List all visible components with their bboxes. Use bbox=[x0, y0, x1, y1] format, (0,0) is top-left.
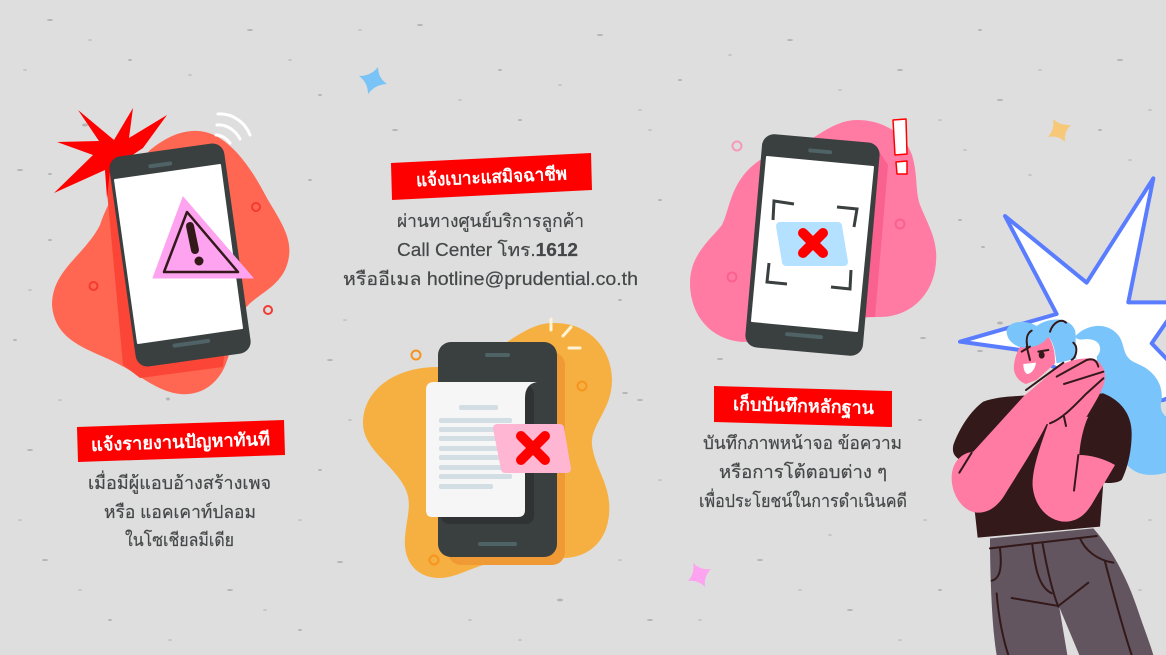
forearm right bbox=[1033, 417, 1115, 522]
icon: blue sparkle bbox=[359, 67, 387, 94]
text: contact channels: ผ่านทางศูนย์บริการลูกค้า bbox=[397, 211, 584, 232]
dots bbox=[412, 350, 586, 564]
heading: report immediately bbox=[77, 420, 285, 462]
scan frame corners bbox=[767, 201, 857, 289]
heading: report fraud bbox=[391, 153, 592, 200]
forearm left bbox=[952, 358, 1105, 513]
text: keep evidence: เพื่อประโยชน์ในการดำเนินคดี bbox=[699, 488, 907, 511]
blob: orange bbox=[363, 323, 612, 578]
icon: rejected card bbox=[497, 428, 567, 469]
hair ponytail bbox=[1075, 326, 1166, 475]
phone bbox=[744, 133, 881, 357]
icon: rejected card bbox=[780, 226, 844, 262]
icon: wifi signal bbox=[216, 114, 250, 143]
text: contact channels: หรืออีเมล hotline@prudential.co.th bbox=[343, 269, 638, 289]
panel: evidence illustration bbox=[690, 119, 936, 357]
icon: orange sparkle bbox=[1048, 119, 1071, 142]
phone bbox=[438, 342, 557, 557]
text: contact channels bbox=[343, 211, 638, 289]
blue burst bbox=[960, 178, 1166, 403]
hair fringe bbox=[1007, 319, 1077, 363]
text: report immediately: ในโซเชียลมีเดีย bbox=[125, 529, 234, 550]
heading: report immediately: แจ้งรายงานปัญหาทันที bbox=[91, 429, 270, 456]
dots bbox=[728, 142, 904, 282]
shirt bbox=[953, 393, 1132, 538]
rays bbox=[551, 319, 580, 348]
text: report immediately: เมื่อมีผู้แอบอ้างสร้างเพจ bbox=[88, 470, 271, 494]
phone bbox=[108, 142, 252, 368]
blob: red bbox=[52, 131, 289, 394]
text: report immediately: หรือ แอคเคาท์ปลอม bbox=[104, 502, 256, 522]
character: surprised woman bbox=[952, 178, 1166, 655]
icon: red burst bbox=[54, 108, 167, 198]
face bbox=[1022, 321, 1076, 360]
text: report immediately bbox=[88, 470, 271, 550]
icon: pink sparkle bbox=[688, 563, 711, 587]
paper document bbox=[426, 382, 537, 517]
heading: keep evidence bbox=[714, 386, 892, 427]
trousers bbox=[990, 528, 1153, 655]
paper shadow bbox=[441, 382, 534, 524]
phone screen bbox=[752, 157, 873, 331]
phone shadow bbox=[105, 170, 226, 378]
heading: keep evidence: เก็บบันทึกหลักฐาน bbox=[733, 392, 875, 420]
text: keep evidence: หรือการโต้ตอบต่าง ๆ bbox=[719, 461, 887, 482]
phone shadow bbox=[448, 352, 565, 565]
panel: report immediately illustration bbox=[52, 108, 289, 394]
head bbox=[1014, 337, 1055, 384]
icon: warning triangle bbox=[153, 197, 253, 278]
panel: document illustration bbox=[363, 319, 612, 578]
phone shadow bbox=[858, 145, 888, 317]
text: contact channels: Call Center โทร. 1612 bbox=[397, 239, 578, 260]
text: keep evidence bbox=[699, 433, 907, 511]
phone screen bbox=[115, 165, 242, 343]
text: keep evidence: บันทึกภาพหน้าจอ ข้อความ bbox=[703, 433, 902, 453]
heading: report fraud: แจ้งเบาะแสมิจฉาชีพ bbox=[416, 164, 567, 190]
icon: exclamation mark bbox=[893, 119, 907, 174]
arm lines bbox=[959, 359, 1103, 491]
blob: pink bbox=[690, 120, 936, 342]
dots bbox=[90, 203, 272, 314]
